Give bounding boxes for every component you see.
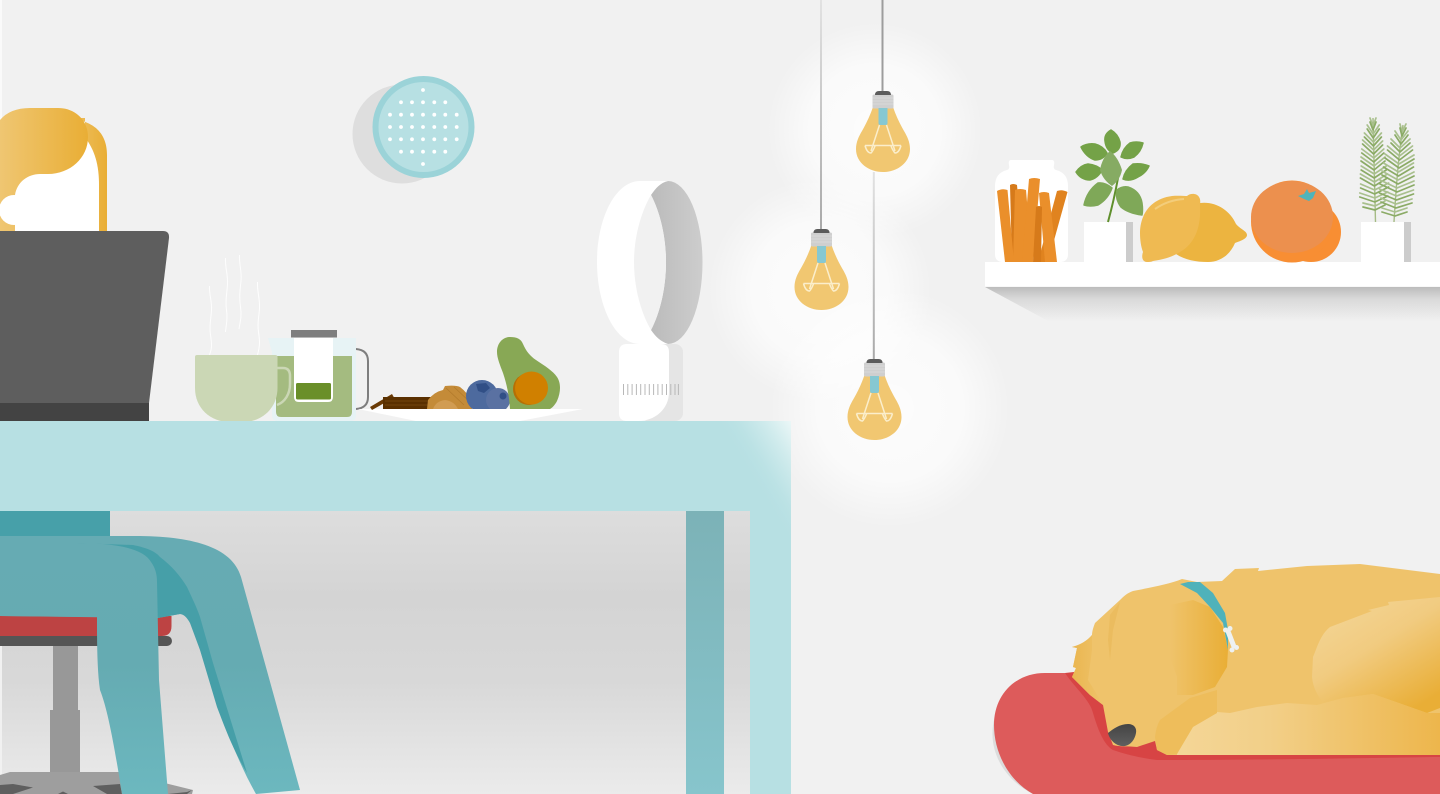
bone tag xyxy=(1223,626,1239,652)
dog head fold xyxy=(1108,602,1120,660)
avocado xyxy=(497,337,560,409)
chair xyxy=(0,616,193,794)
dog belly xyxy=(1177,694,1440,755)
person at laptop xyxy=(0,108,107,231)
bulb middle xyxy=(794,229,848,310)
tea cup xyxy=(195,355,290,422)
dog front paw xyxy=(1155,690,1217,755)
chocolate sticks xyxy=(370,394,431,410)
steam xyxy=(209,255,260,355)
light glow around bulbs xyxy=(708,22,1010,528)
near leg xyxy=(0,536,168,794)
glass jug with infuser xyxy=(268,330,368,421)
bulb top xyxy=(856,91,910,172)
bulb bottom xyxy=(848,359,902,440)
torso xyxy=(0,511,110,536)
dog left ear xyxy=(1072,635,1103,705)
dog hind leg xyxy=(1312,597,1440,713)
mint plant in pot xyxy=(1076,130,1149,262)
dog ear shade xyxy=(1170,600,1228,695)
jar of cinnamon sticks xyxy=(995,160,1068,262)
dog nose xyxy=(1108,724,1136,746)
lemons xyxy=(1140,194,1247,262)
far leg xyxy=(0,536,300,794)
desk xyxy=(0,421,791,794)
plate xyxy=(358,409,583,421)
walnut xyxy=(427,386,472,409)
blueberries xyxy=(466,380,510,409)
crease shadow on leg xyxy=(73,543,247,773)
sleeping dog xyxy=(1072,564,1440,755)
dog body and head xyxy=(1072,564,1440,755)
dog collar xyxy=(1180,582,1228,650)
shadow under desk xyxy=(2,511,750,794)
shelf xyxy=(985,262,1440,322)
oranges xyxy=(1251,180,1341,262)
laptop xyxy=(0,231,169,421)
rosemary plant in pot xyxy=(1360,118,1414,262)
dog bed xyxy=(992,672,1440,794)
bladeless fan xyxy=(597,181,702,421)
hanging bulb cords xyxy=(820,0,884,359)
wall sensor disc xyxy=(352,79,472,184)
